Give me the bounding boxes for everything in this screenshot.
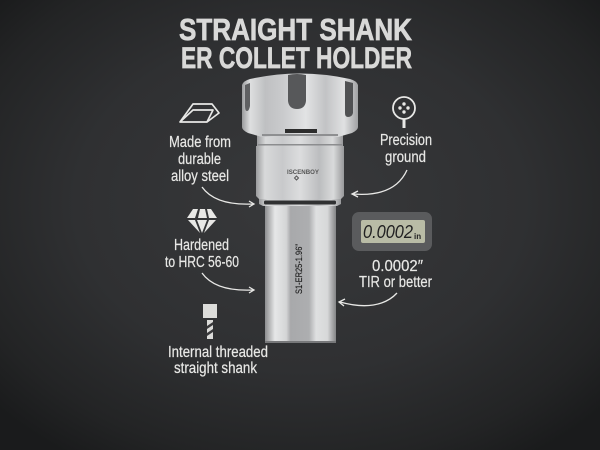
label: made from durable alloy steel (169, 104, 254, 207)
icon: precision gauge (393, 97, 415, 128)
label: TIR: TIR or better (359, 274, 432, 291)
collet holder tool (242, 74, 358, 343)
nut slots (288, 74, 306, 109)
label: made from durable alloy steel: Made from (169, 134, 231, 151)
icon: threaded end (203, 304, 217, 339)
label: precision ground: ground (385, 149, 426, 166)
label: internal threaded shank (168, 304, 268, 377)
arrow (352, 170, 407, 197)
shank (265, 203, 336, 343)
title: ER COLLET HOLDER (181, 42, 412, 75)
arrow (202, 273, 254, 293)
label: hardened: Hardened (174, 237, 229, 254)
title: STRAIGHT SHANK (179, 12, 413, 47)
icon: digital readout: in (414, 232, 421, 241)
arrow (339, 293, 397, 306)
body (256, 134, 344, 206)
arrow (202, 187, 254, 207)
brand mark: ISCENBOY (287, 170, 319, 176)
label: hardened (165, 209, 254, 293)
label: internal threaded shank: Internal threaded (168, 344, 268, 361)
label: internal threaded shank: straight shank (174, 360, 257, 377)
title (179, 12, 413, 75)
icon: diamond (187, 209, 217, 233)
collet nut (242, 74, 358, 137)
shank marking: S1-ER25-1.96" (294, 244, 305, 294)
label: precision ground (352, 97, 432, 197)
icon: digital readout: 0.0002 (363, 222, 413, 242)
label: hardened: to HRC 56-60 (165, 254, 239, 271)
icon: digital readout (352, 212, 432, 251)
label: made from durable alloy steel: alloy steel (171, 168, 229, 185)
label: made from durable alloy steel: durable (178, 151, 221, 168)
icon: steel ingot (180, 104, 219, 122)
label: TIR (339, 212, 432, 306)
label: precision ground: Precision (380, 132, 432, 149)
label: TIR: 0.0002″ (372, 258, 423, 275)
